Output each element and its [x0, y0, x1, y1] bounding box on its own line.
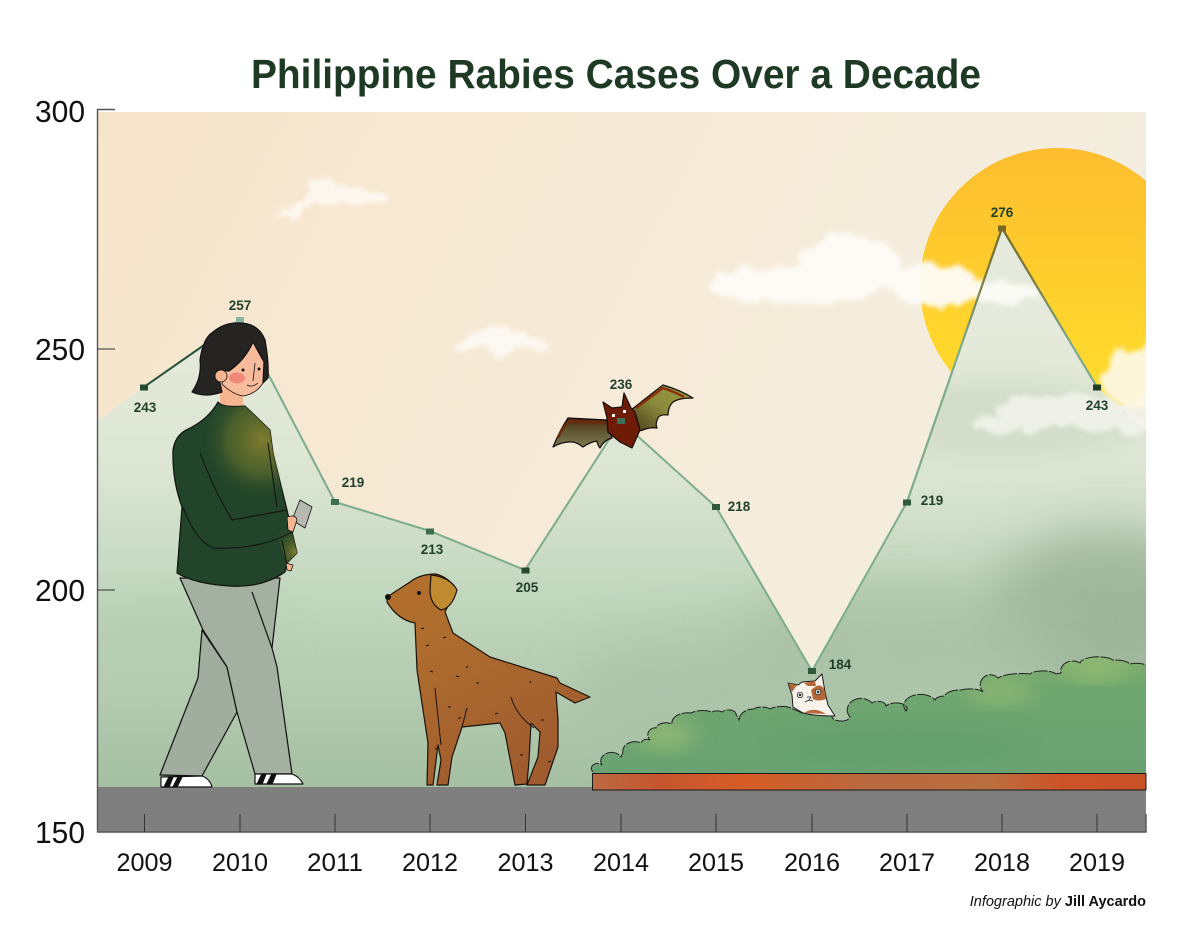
data labels: 218: [728, 499, 751, 514]
ear: [215, 370, 227, 382]
cloud: large near sun: [708, 235, 1039, 307]
face: [222, 342, 265, 396]
title: Philippine Rabies Cases Over a Decade: [251, 51, 981, 97]
data labels: 257: [229, 298, 251, 313]
axes: [97, 110, 1146, 832]
sweater: [173, 402, 297, 586]
left wing red edge: [558, 421, 605, 438]
x-axis labels: 2012: [402, 849, 458, 877]
x-axis labels: 2014: [593, 849, 649, 877]
icon: sun: [920, 148, 1146, 407]
x-axis labels: 2016: [784, 849, 840, 877]
line chart: cases per year: [144, 228, 1097, 671]
data labels: 205: [516, 580, 539, 595]
cat eyes: [797, 689, 821, 702]
hair: [192, 323, 268, 395]
planter box: [592, 774, 1146, 790]
phone: [292, 500, 312, 528]
left shoe: [161, 776, 212, 787]
sky: [98, 112, 1146, 668]
data labels: 184: [829, 657, 852, 672]
cheek: [229, 372, 245, 384]
dog eye and nose: [385, 591, 421, 600]
x-axis labels: 2015: [688, 849, 744, 877]
dog ear: [430, 575, 457, 610]
front leg: [180, 578, 292, 774]
illustration: walking person: [160, 323, 312, 787]
x-axis labels: 2009: [116, 849, 172, 877]
hands: [286, 516, 297, 571]
illustration: dog: [385, 574, 590, 785]
illustration: bat: [553, 385, 693, 448]
y-axis labels: 250: [35, 332, 85, 367]
data labels: 243: [1086, 398, 1109, 413]
bat marker: [617, 418, 625, 424]
illustration: cat: [788, 674, 835, 716]
credit: Infographic by Jill Aycardo: [970, 894, 1146, 910]
cloud: small centre: [449, 324, 545, 352]
data labels: [134, 205, 1109, 672]
right wing: [631, 385, 693, 432]
data labels: 236: [610, 377, 633, 392]
y-axis labels: 150: [35, 815, 85, 850]
right wing red edge: [636, 388, 684, 408]
ground: [98, 787, 1146, 832]
x-axis labels: 2018: [974, 849, 1030, 877]
data labels: 276: [991, 205, 1014, 220]
data labels: 213: [421, 542, 444, 557]
eyes and smile: [242, 363, 260, 386]
y-axis labels: [35, 94, 85, 850]
y-axis labels: 200: [35, 573, 85, 608]
data markers: [140, 226, 1101, 674]
neck: [220, 382, 243, 408]
x-axis labels: 2010: [212, 849, 268, 877]
x-axis labels: 2013: [498, 849, 554, 877]
cat markings: [788, 681, 826, 714]
y-axis labels: 300: [35, 94, 85, 129]
back leg: [160, 630, 237, 776]
x-axis labels: 2011: [307, 849, 363, 877]
x-axis labels: [116, 849, 1125, 877]
right shoe: [255, 774, 303, 784]
bat body: [603, 393, 640, 448]
cloud: small upper left: [268, 176, 387, 222]
bush: [590, 650, 1150, 776]
left wing: [553, 418, 612, 448]
data labels: 219: [342, 475, 364, 490]
dog fur specks: [421, 628, 551, 762]
bat eyes: [612, 410, 626, 417]
data labels: 219: [921, 493, 943, 508]
cloud: right edge over sun: [972, 332, 1146, 437]
x-axis labels: 2019: [1069, 849, 1125, 877]
area under the line: green hills: [98, 232, 1146, 787]
data labels: 243: [134, 400, 157, 415]
x-axis labels: 2017: [879, 849, 935, 877]
panel: illustrated plot background: [70, 112, 1200, 802]
cloud: low across hill: [970, 393, 1155, 434]
